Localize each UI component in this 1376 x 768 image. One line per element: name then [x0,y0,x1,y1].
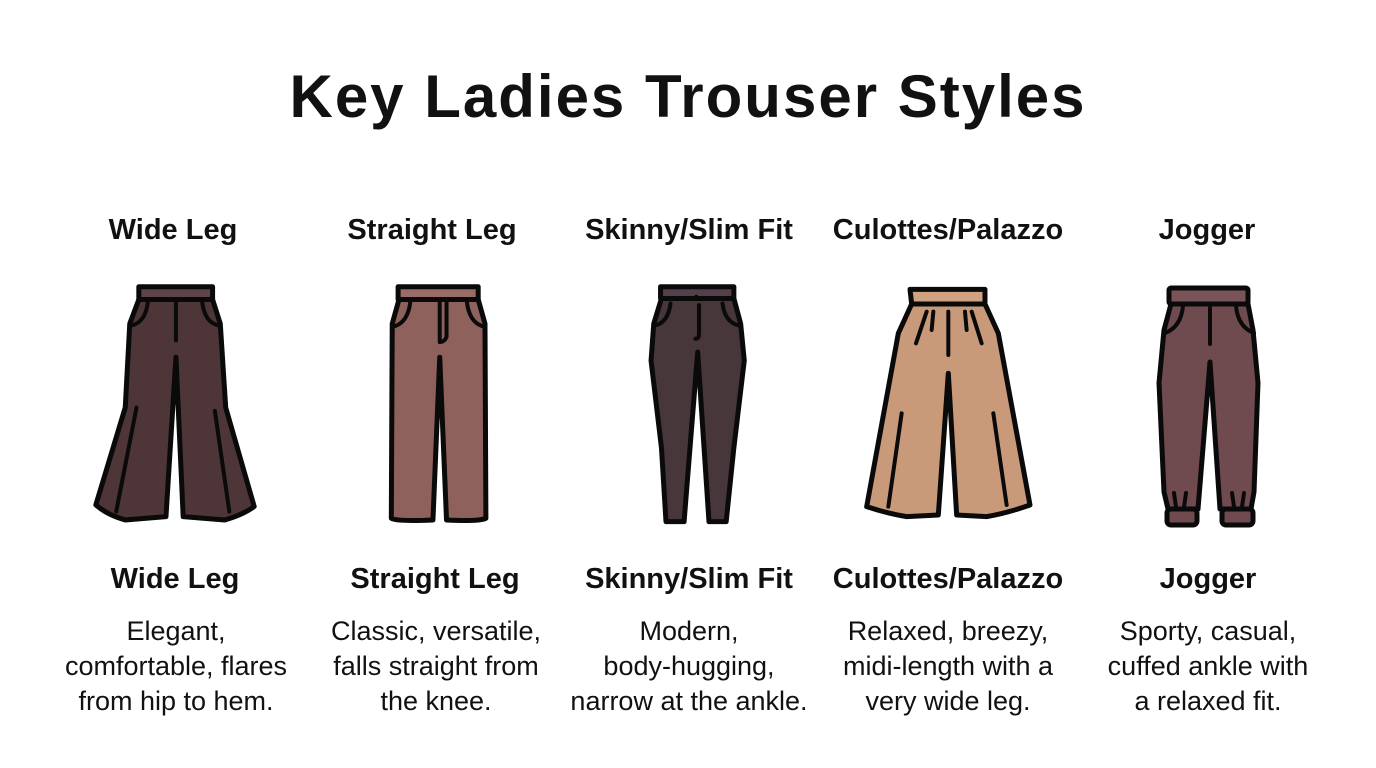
text: culottes desc: midi-length with a [843,651,1053,681]
text: wide leg desc [65,616,287,716]
icon: skinny trousers [651,287,744,522]
text: jogger desc: a relaxed fit. [1134,686,1282,716]
heading: skinny: Skinny/Slim Fit [585,563,793,595]
heading: jogger: Jogger [1160,563,1256,595]
text: wide leg desc: Elegant, [126,616,226,646]
text: culottes desc: very wide leg. [865,686,1031,716]
heading: culottes top: Culottes/Palazzo [833,214,1063,246]
text: jogger desc: Sporty, casual, [1120,616,1296,646]
heading: straight leg: Straight Leg [350,563,520,595]
text: straight leg desc [331,616,541,716]
text: jogger desc [1108,616,1308,716]
heading: skinny top: Skinny/Slim Fit [585,214,793,246]
text: straight leg desc: the knee. [380,686,492,716]
text: jogger desc: cuffed ankle with [1108,651,1308,681]
text: culottes desc [843,616,1053,716]
icon: straight leg trousers [391,287,486,521]
heading: wide leg top: Wide Leg [109,214,237,246]
text: wide leg desc: from hip to hem. [78,686,274,716]
heading: jogger top: Jogger [1159,214,1255,246]
heading: wide leg: Wide Leg [111,563,239,595]
text: straight leg desc: Classic, versatile, [331,616,541,646]
text: skinny desc: body-hugging, [603,651,775,681]
title: Key Ladies Trouser Styles [289,63,1086,130]
heading: straight leg top: Straight Leg [347,214,517,246]
heading: culottes: Culottes/Palazzo [833,563,1063,595]
text: wide leg desc: comfortable, flares [65,651,287,681]
text: skinny desc: Modern, [639,616,739,646]
text: culottes desc: Relaxed, breezy, [848,616,1048,646]
icon: jogger [1159,288,1258,525]
icon: culottes [867,289,1030,517]
icon: wide leg trousers [96,287,254,520]
text: straight leg desc: falls straight from [333,651,539,681]
text: skinny desc: narrow at the ankle. [570,686,808,716]
text: skinny desc [570,616,808,716]
